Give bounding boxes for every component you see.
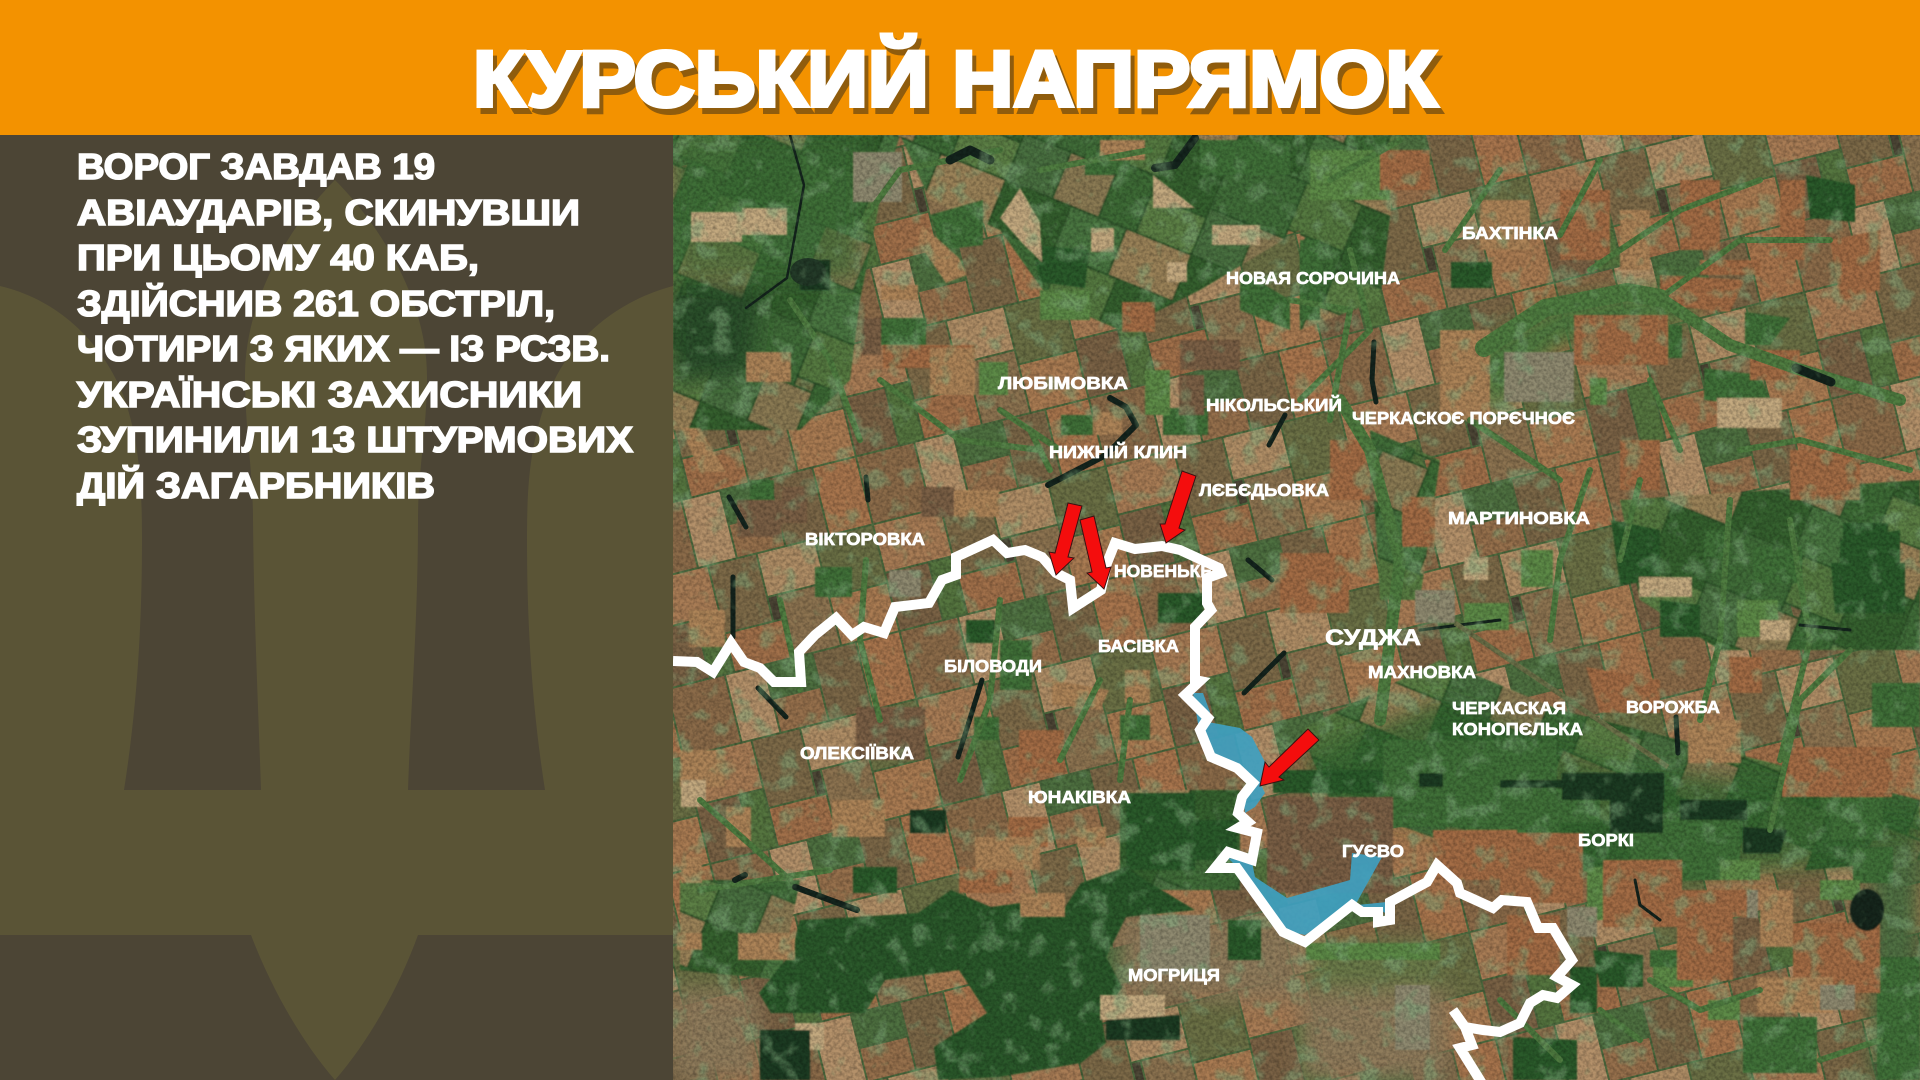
title: КУРСЬКИЙ НАПРЯМОК [473,33,1438,123]
text block: report: ВОРОГ ЗАВДАВ 19 [77,146,435,187]
text block: report: ПРИ ЦЬОМУ 40 КАБ, [77,237,479,278]
panel: satellite map [673,135,1920,1080]
map terrain [673,135,1920,1080]
settlement labels: КОНОПЄЛЬКА [1452,719,1583,739]
settlement labels: ГУЄВО [1342,841,1404,861]
occupied area: blue zone [1193,693,1387,935]
settlement labels: БОРКІ [1578,830,1634,850]
settlement labels: ЮНАКІВКА [1028,787,1131,807]
light-green fields [979,150,1860,1020]
arrow: attack towards blue zone [1260,729,1319,786]
header band [0,0,1920,135]
settlement labels: БАСІВКА [1098,636,1179,656]
text block: report: ЗУПИНИЛИ 13 ШТУРМОВИХ [77,419,633,460]
icon: trident emblem [0,180,673,1080]
settlement labels: МОГРИЦЯ [1128,965,1220,985]
settlement labels: ВОРОЖБА [1626,697,1720,717]
settlement labels: ОЛЕКСІЇВКА [800,743,914,763]
text block: report [77,146,633,506]
text block: report: ДІЙ ЗАГАРБНИКІВ [77,464,435,506]
dark brown fields [737,318,1393,893]
settlement labels: БАХТІНКА [1462,223,1558,243]
text block: report: ЗДІЙСНИВ 261 ОБСТРІЛ, [77,282,555,324]
settlement labels: НИЖНІЙ КЛИН [1049,441,1187,462]
panel: left text panel with trident [0,146,673,1080]
grey areas [853,152,1855,1050]
settlement labels: НОВЕНЬКЕ [1114,561,1212,581]
border line [673,540,1572,1080]
pale fields [681,175,1790,1050]
settlement labels: БІЛОВОДИ [944,656,1042,676]
tan fields [677,140,1833,1013]
settlement labels: МАХНОВКА [1368,662,1476,682]
settlement labels: НІКОЛЬСЬКИЙ [1206,394,1342,415]
green stream belts [700,140,1910,1060]
arrow: attack north-east [1160,471,1196,543]
mid-green fields [750,140,1920,1080]
text block: report: ЧОТИРИ З ЯКИХ — ІЗ РСЗВ. [77,328,610,369]
settlement labels: ЧЕРКАСКОЄ ПОРЄЧНОЄ [1352,408,1575,428]
settlement labels: ЛЮБІМОВКА [998,373,1128,393]
arrow: attack north-west [1049,503,1082,575]
forest [759,867,1195,1080]
fields [677,140,1920,1080]
settlement labels: ЧЕРКАСКАЯ [1452,698,1566,718]
settlement labels: НОВАЯ СОРОЧИНА [1226,268,1400,288]
arrow: attack centre [1080,516,1111,589]
diagonal road [1455,623,1668,767]
text block: report: УКРАЇНСЬКІ ЗАХИСНИКИ [77,374,582,415]
settlement labels: ВІКТОРОВКА [805,529,925,549]
very dark forest [760,260,1787,1080]
dark-green fields [853,175,1905,1080]
settlement labels: СУДЖА [1325,625,1421,650]
settlement labels: ЛЄБЄДЬОВКА [1199,480,1329,500]
rivers and ponds [729,135,1850,920]
settlement labels: МАРТИНОВКА [1448,508,1590,528]
text block: report: АВІАУДАРІВ, СКИНУВШИ [77,192,580,233]
brown fields [883,150,1892,993]
settlement labels [800,223,1720,985]
